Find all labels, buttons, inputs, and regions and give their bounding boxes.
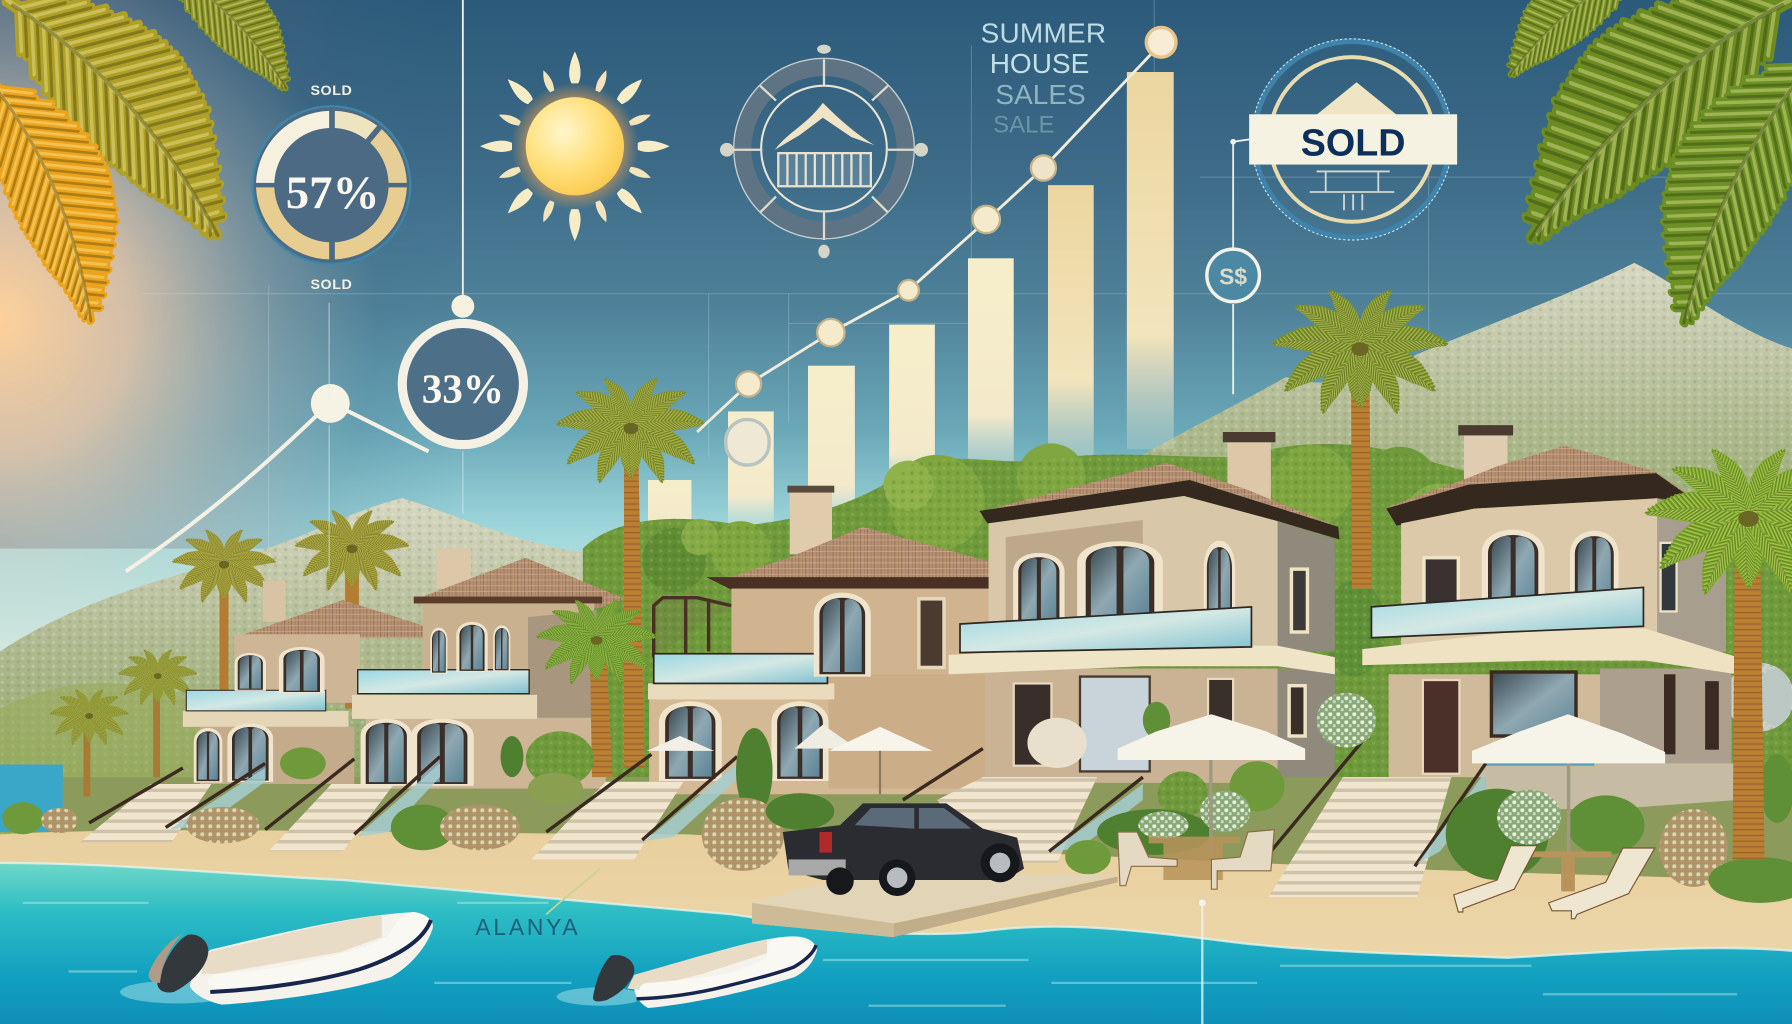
walls bbox=[731, 589, 992, 686]
foam wake bbox=[557, 987, 643, 1006]
donut stat 33 bbox=[402, 0, 523, 445]
stairs house 3 bbox=[531, 782, 683, 859]
mountain right bbox=[1109, 263, 1792, 640]
outboard motor bbox=[593, 955, 634, 1001]
palm tree behind bbox=[1273, 284, 1447, 589]
inflatable boat left bbox=[120, 912, 433, 1005]
shrubs and flowers bbox=[2, 669, 1792, 903]
sold text: SOLD bbox=[1301, 121, 1406, 163]
location label: ALANYA bbox=[475, 914, 580, 940]
terrace planting base bbox=[63, 777, 1792, 903]
seats bbox=[201, 915, 382, 974]
chimney bbox=[1464, 432, 1507, 487]
band ring bbox=[743, 67, 905, 230]
staircases bbox=[80, 737, 1486, 897]
roof bbox=[775, 103, 874, 150]
frond upper bbox=[148, 0, 321, 90]
lounger right bbox=[1549, 848, 1655, 919]
line 3: SALES bbox=[995, 79, 1086, 110]
walls bbox=[234, 634, 360, 703]
stairs house 4 bbox=[937, 777, 1097, 863]
label bottom: SOLD bbox=[310, 277, 352, 293]
ground windows bbox=[1423, 680, 1459, 774]
tail light and bumper bbox=[819, 832, 832, 853]
balcony bbox=[960, 607, 1251, 653]
small umbrellas bbox=[647, 725, 933, 794]
canopy bbox=[1472, 714, 1665, 763]
bar 2 bbox=[808, 366, 855, 537]
building mark bbox=[1310, 171, 1394, 210]
location label bbox=[475, 869, 600, 940]
chart point left bbox=[311, 384, 350, 423]
top right palm fronds bbox=[1463, 0, 1792, 326]
pole bbox=[1567, 754, 1570, 880]
table bbox=[1149, 837, 1240, 880]
far palm tree 1 bbox=[50, 687, 128, 797]
house 3 bbox=[648, 486, 992, 794]
navy stripe bbox=[210, 920, 431, 992]
value: 33% bbox=[422, 365, 504, 411]
ground floor bbox=[985, 669, 1278, 783]
hull bbox=[190, 912, 433, 1005]
ring bbox=[253, 106, 410, 264]
windows upper bbox=[1424, 558, 1458, 626]
connector and currency badge bbox=[1207, 139, 1259, 394]
outboard motor bbox=[157, 935, 208, 993]
tube bbox=[637, 937, 815, 1000]
balcony bbox=[358, 670, 529, 694]
trend nodes bbox=[736, 371, 761, 397]
windows bbox=[279, 647, 325, 693]
pergola bbox=[654, 598, 731, 657]
chairs bbox=[1118, 832, 1177, 886]
house 2 bbox=[352, 549, 625, 789]
roof bbox=[979, 463, 1338, 527]
chart bars bbox=[648, 72, 1174, 537]
frond lower bbox=[1592, 28, 1792, 326]
label top: SOLD bbox=[310, 83, 352, 99]
frond middle bbox=[0, 0, 290, 239]
seats bbox=[627, 939, 767, 990]
upper wall bbox=[1401, 498, 1726, 651]
banner bbox=[1249, 114, 1457, 165]
node bbox=[451, 295, 474, 318]
stairs house 2 bbox=[269, 784, 394, 851]
concrete parking pad bbox=[752, 874, 1118, 937]
ground windows bbox=[1014, 683, 1051, 766]
icon: house emblem bbox=[720, 45, 928, 258]
ground wall bbox=[1389, 674, 1731, 777]
donut stat 57 bbox=[253, 83, 410, 293]
black pickup truck bbox=[783, 803, 1024, 896]
balcony bbox=[186, 690, 326, 711]
lounger left bbox=[1454, 846, 1537, 912]
frond middle bbox=[1463, 0, 1792, 243]
hedges bbox=[2, 802, 43, 834]
background trees bbox=[583, 443, 1792, 800]
windows bbox=[814, 593, 871, 677]
tube bbox=[208, 912, 430, 993]
sand beach bbox=[0, 830, 1792, 966]
windows upper bbox=[1013, 553, 1065, 624]
bar 3 bbox=[889, 325, 935, 507]
roof bbox=[414, 558, 625, 608]
coin pendant bbox=[726, 419, 769, 465]
stairs house 1 bbox=[80, 784, 211, 842]
roof icon bbox=[1314, 82, 1399, 117]
body bbox=[783, 803, 1024, 880]
pole bbox=[1209, 754, 1213, 857]
wheels bbox=[879, 859, 915, 896]
chimney bbox=[790, 486, 832, 554]
house 5 bbox=[1362, 425, 1737, 809]
house 4 bbox=[949, 432, 1339, 783]
outer ring bbox=[1254, 41, 1450, 238]
water bbox=[0, 863, 1792, 1024]
value: 57% bbox=[286, 167, 379, 219]
chimney bbox=[1227, 437, 1271, 505]
bar 5 bbox=[1048, 185, 1094, 465]
side table bbox=[1526, 851, 1611, 891]
ring bbox=[402, 323, 523, 445]
vertical guide bbox=[329, 303, 463, 571]
chart title bbox=[981, 17, 1106, 139]
foam wake bbox=[120, 981, 234, 1003]
growth trend line bbox=[697, 27, 1176, 465]
upper wall bbox=[989, 496, 1278, 651]
rays bbox=[480, 51, 670, 241]
walls bbox=[423, 603, 594, 695]
windows bbox=[855, 808, 971, 829]
far palm tree 2 bbox=[119, 647, 197, 777]
icon: sun bbox=[480, 51, 670, 241]
hanging line bbox=[462, 0, 464, 295]
big palm tree right bbox=[1646, 443, 1792, 859]
umbrella and dining set bbox=[1118, 714, 1305, 889]
bar 0 bbox=[648, 480, 691, 537]
spokes and nodes bbox=[731, 59, 918, 240]
line 2: HOUSE bbox=[990, 48, 1089, 79]
disc bbox=[526, 97, 624, 195]
hull bbox=[633, 936, 817, 1008]
frond lower bbox=[0, 56, 177, 323]
roof bbox=[1386, 446, 1698, 507]
chart line left bbox=[126, 402, 429, 571]
palm tree mid front bbox=[537, 596, 656, 777]
umbrella and loungers bbox=[1454, 714, 1665, 919]
bar 1 bbox=[728, 411, 774, 531]
far palm tree 4 bbox=[295, 507, 409, 709]
base wall bbox=[1486, 763, 1737, 809]
mountain left bbox=[0, 498, 600, 846]
stairs house 5 bbox=[1269, 777, 1451, 897]
navy stripe bbox=[637, 945, 816, 999]
frond upper bbox=[1482, 0, 1653, 77]
canopy bbox=[1118, 714, 1305, 760]
chimney bbox=[437, 549, 471, 589]
balcony bbox=[654, 654, 827, 683]
top left palm fronds bbox=[0, 0, 321, 323]
roof bbox=[706, 527, 992, 585]
chimney bbox=[263, 581, 286, 622]
roof bbox=[234, 600, 425, 638]
stair rails bbox=[89, 737, 1486, 866]
line 1: SUMMER bbox=[981, 17, 1106, 48]
building bbox=[778, 153, 871, 186]
sold stamp bbox=[1249, 39, 1457, 240]
balcony bbox=[1371, 587, 1643, 638]
lagoon water left bbox=[0, 765, 63, 832]
bar 4 bbox=[968, 258, 1014, 481]
line 4: SALE bbox=[993, 112, 1055, 139]
house 1 bbox=[183, 581, 425, 784]
inflatable boat right bbox=[557, 936, 817, 1008]
windows bbox=[456, 622, 488, 672]
connector and currency badge: S$ bbox=[1219, 264, 1247, 290]
palm tree mid tall bbox=[557, 374, 705, 768]
far palm tree 3 bbox=[173, 527, 275, 697]
bar 6 bbox=[1127, 72, 1174, 449]
